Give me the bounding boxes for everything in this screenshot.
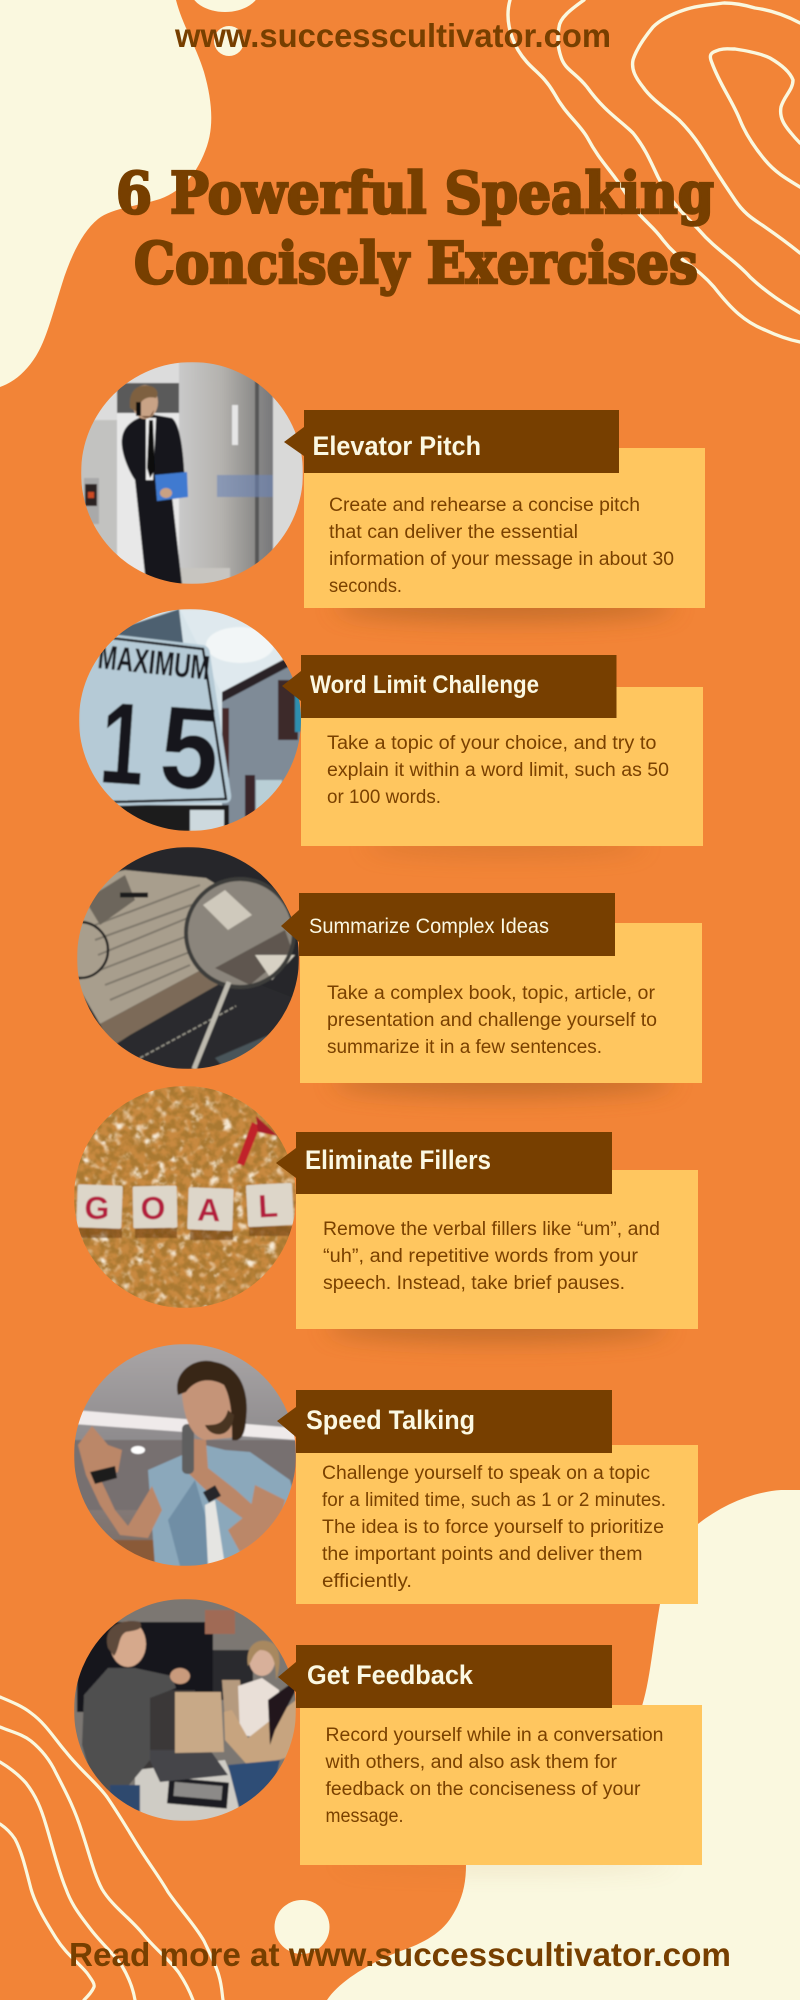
text bbox=[323, 1219, 660, 1294]
text: seconds. bbox=[329, 576, 402, 597]
text: Take a complex book, topic, article, or bbox=[327, 983, 656, 1004]
photo: maximum 15 sign: 1 bbox=[96, 677, 149, 810]
text: efficiently. bbox=[322, 1571, 412, 1592]
photo: goal tiles on cork: O bbox=[140, 1190, 166, 1226]
box: description bbox=[296, 1170, 698, 1329]
title bbox=[116, 160, 714, 297]
bottom-right cream blob bbox=[327, 1490, 800, 2000]
box: description bbox=[300, 1705, 702, 1865]
text: for a limited time, such as 1 or 2 minutes. bbox=[322, 1490, 666, 1511]
banner bbox=[278, 1645, 612, 1708]
text: summarize it in a few sentences. bbox=[327, 1037, 602, 1058]
top-right contour lines bbox=[508, 0, 800, 342]
panel: get feedback bbox=[74, 1599, 702, 1865]
text: “uh”, and repetitive words from your bbox=[323, 1246, 639, 1267]
banner bbox=[277, 1390, 612, 1453]
photo: maximum 15 sign bbox=[79, 609, 301, 831]
box: description bbox=[304, 448, 705, 608]
man bbox=[122, 414, 185, 584]
text bbox=[327, 733, 669, 808]
heading: Elevator Pitch bbox=[312, 431, 481, 461]
text: the important points and deliver them bbox=[322, 1544, 642, 1565]
photo: man speaking with microphone bbox=[74, 1344, 296, 1566]
text bbox=[327, 983, 657, 1058]
small cream circle bottom bbox=[274, 1900, 330, 1954]
photo: magnifying glass on book bbox=[77, 847, 299, 1069]
text: feedback on the conciseness of your bbox=[326, 1779, 641, 1800]
text: Remove the verbal fillers like “um”, and bbox=[323, 1219, 660, 1240]
text: speech. Instead, take brief pauses. bbox=[323, 1273, 625, 1294]
photo: man on phone at elevator bbox=[81, 362, 303, 584]
box: description bbox=[300, 923, 702, 1083]
title: 6 Powerful Speaking bbox=[116, 160, 714, 227]
banner bbox=[282, 655, 616, 718]
photo: goal tiles on cork: L bbox=[257, 1188, 279, 1225]
text: Take a topic of your choice, and try to bbox=[327, 733, 656, 754]
text bbox=[324, 1725, 664, 1827]
panel: word limit challenge bbox=[79, 609, 703, 846]
text: explain it within a word limit, such as 50 bbox=[327, 760, 669, 781]
top-left cream blob bbox=[0, 0, 211, 387]
footer url: Read more at www.successcultivator.com bbox=[69, 1936, 731, 1973]
banner bbox=[284, 410, 619, 473]
heading: Get Feedback bbox=[307, 1660, 474, 1690]
photo: goal tiles on cork bbox=[74, 1086, 296, 1308]
text: with others, and also ask them for bbox=[324, 1752, 618, 1773]
heading: Summarize Complex Ideas bbox=[309, 915, 549, 938]
text: Record yourself while in a conversation bbox=[326, 1725, 664, 1746]
panel: eliminate fillers bbox=[74, 1086, 698, 1329]
panel: speed talking bbox=[74, 1344, 698, 1604]
heading: Eliminate Fillers bbox=[305, 1145, 491, 1175]
box: description bbox=[296, 1445, 698, 1604]
text: message. bbox=[326, 1806, 404, 1827]
bottom-left contour lines bbox=[0, 1697, 223, 2000]
photo: goal tiles on cork: A bbox=[197, 1192, 221, 1228]
small cream circle bbox=[214, 26, 244, 56]
text: Create and rehearse a concise pitch bbox=[329, 495, 640, 516]
text: that can deliver the essential bbox=[329, 522, 578, 543]
panel: elevator pitch bbox=[81, 362, 705, 608]
banner bbox=[281, 893, 615, 956]
top cream ellipse bbox=[190, 0, 260, 12]
panel: summarize complex ideas bbox=[52, 847, 702, 1083]
photo: shop assistant handing over a bag bbox=[74, 1599, 296, 1821]
text bbox=[329, 495, 674, 597]
photo: maximum 15 sign: MAXIMUM bbox=[96, 638, 212, 688]
box shadows bbox=[327, 592, 675, 1871]
text: Challenge yourself to speak on a topic bbox=[322, 1463, 650, 1484]
heading: Speed Talking bbox=[306, 1405, 475, 1435]
text: information of your message in about 30 bbox=[329, 549, 674, 570]
photo: goal tiles on cork: G bbox=[84, 1190, 110, 1226]
text: presentation and challenge yourself to bbox=[327, 1010, 657, 1031]
photo: maximum 15 sign: 5 bbox=[156, 681, 223, 815]
heading: Word Limit Challenge bbox=[310, 671, 539, 699]
banner bbox=[276, 1132, 612, 1194]
text: or 100 words. bbox=[327, 787, 441, 808]
text bbox=[322, 1463, 666, 1592]
box: description bbox=[301, 687, 703, 846]
website url: www.successcultivator.com bbox=[174, 17, 611, 54]
text: The idea is to force yourself to prioritize bbox=[322, 1517, 664, 1538]
title: Concisely Exercises bbox=[134, 230, 698, 297]
